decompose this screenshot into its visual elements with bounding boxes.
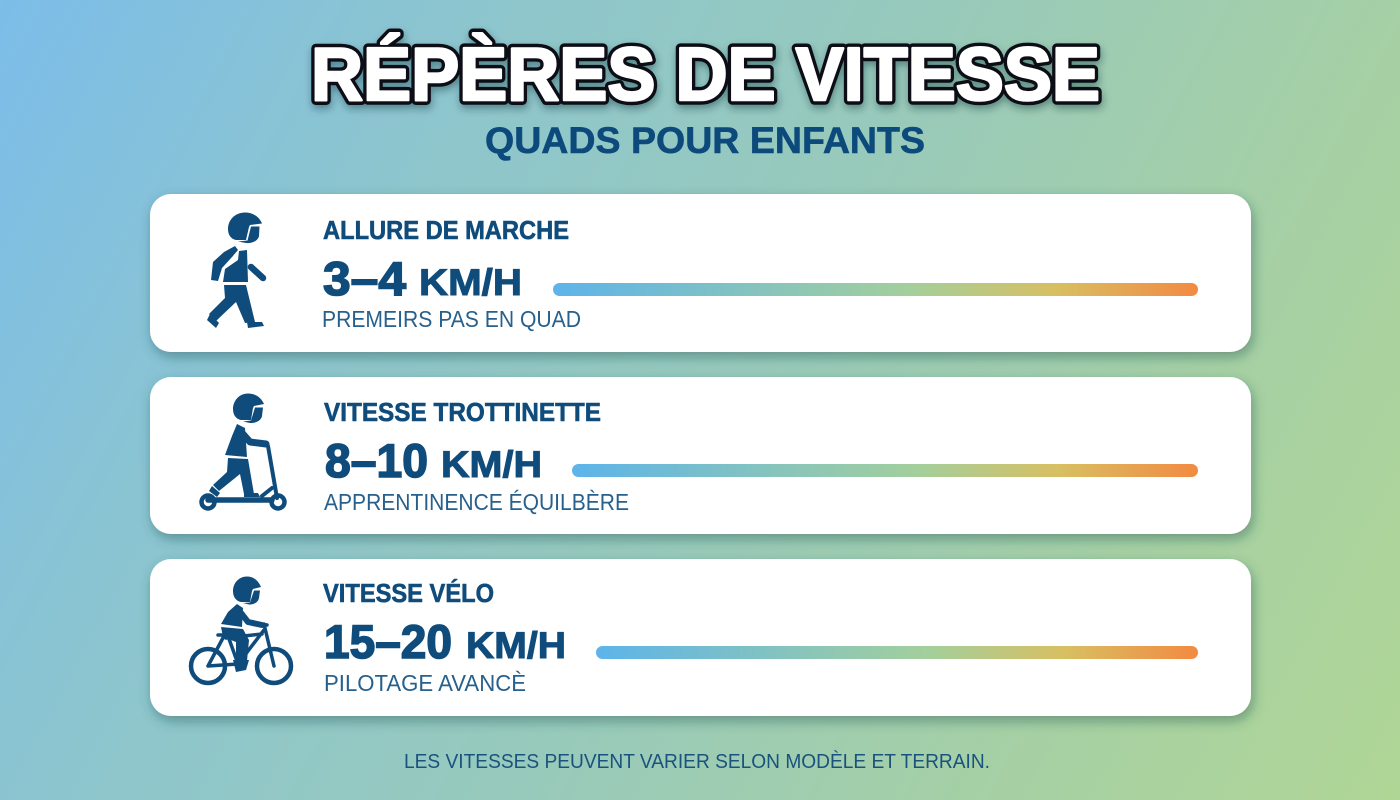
description: PILOTAGE AVANCÈ bbox=[324, 670, 526, 696]
title: RÉPÈRES DE VITESSE bbox=[311, 32, 1100, 116]
speed unit: KM/H bbox=[466, 625, 566, 666]
description: PREMEIRS PAS EN QUAD bbox=[322, 306, 581, 332]
panel: allure de marche bbox=[150, 194, 1251, 352]
description: APPRENTINENCE ÉQUILBÈRE bbox=[324, 489, 629, 515]
speed gradient bar bbox=[572, 464, 1198, 477]
speed value: 15–20 bbox=[324, 615, 452, 668]
speed value: 8–10 bbox=[325, 434, 428, 487]
footnote: LES VITESSES PEUVENT VARIER SELON MODÈLE ET TERRAIN. bbox=[404, 750, 990, 773]
panel: vitesse vélo bbox=[150, 559, 1251, 716]
icon: child on scooter bbox=[202, 394, 284, 508]
icon: child on bicycle bbox=[191, 576, 291, 683]
title: RÉPÈRES DE VITESSE bbox=[311, 32, 1100, 116]
speed heading: VITESSE TROTTINETTE bbox=[324, 399, 601, 427]
speed value: 3–4 bbox=[323, 252, 406, 305]
speed unit: KM/H bbox=[419, 262, 522, 303]
speed heading: VITESSE VÉLO bbox=[323, 579, 494, 608]
speed gradient bar bbox=[596, 646, 1198, 659]
icon: walking child bbox=[207, 212, 264, 328]
panel: vitesse trottinette bbox=[150, 377, 1251, 534]
speed gradient bar bbox=[553, 283, 1198, 296]
subtitle: QUADS POUR ENFANTS bbox=[485, 120, 925, 161]
speed heading: ALLURE DE MARCHE bbox=[323, 217, 569, 245]
speed unit: KM/H bbox=[441, 444, 542, 485]
